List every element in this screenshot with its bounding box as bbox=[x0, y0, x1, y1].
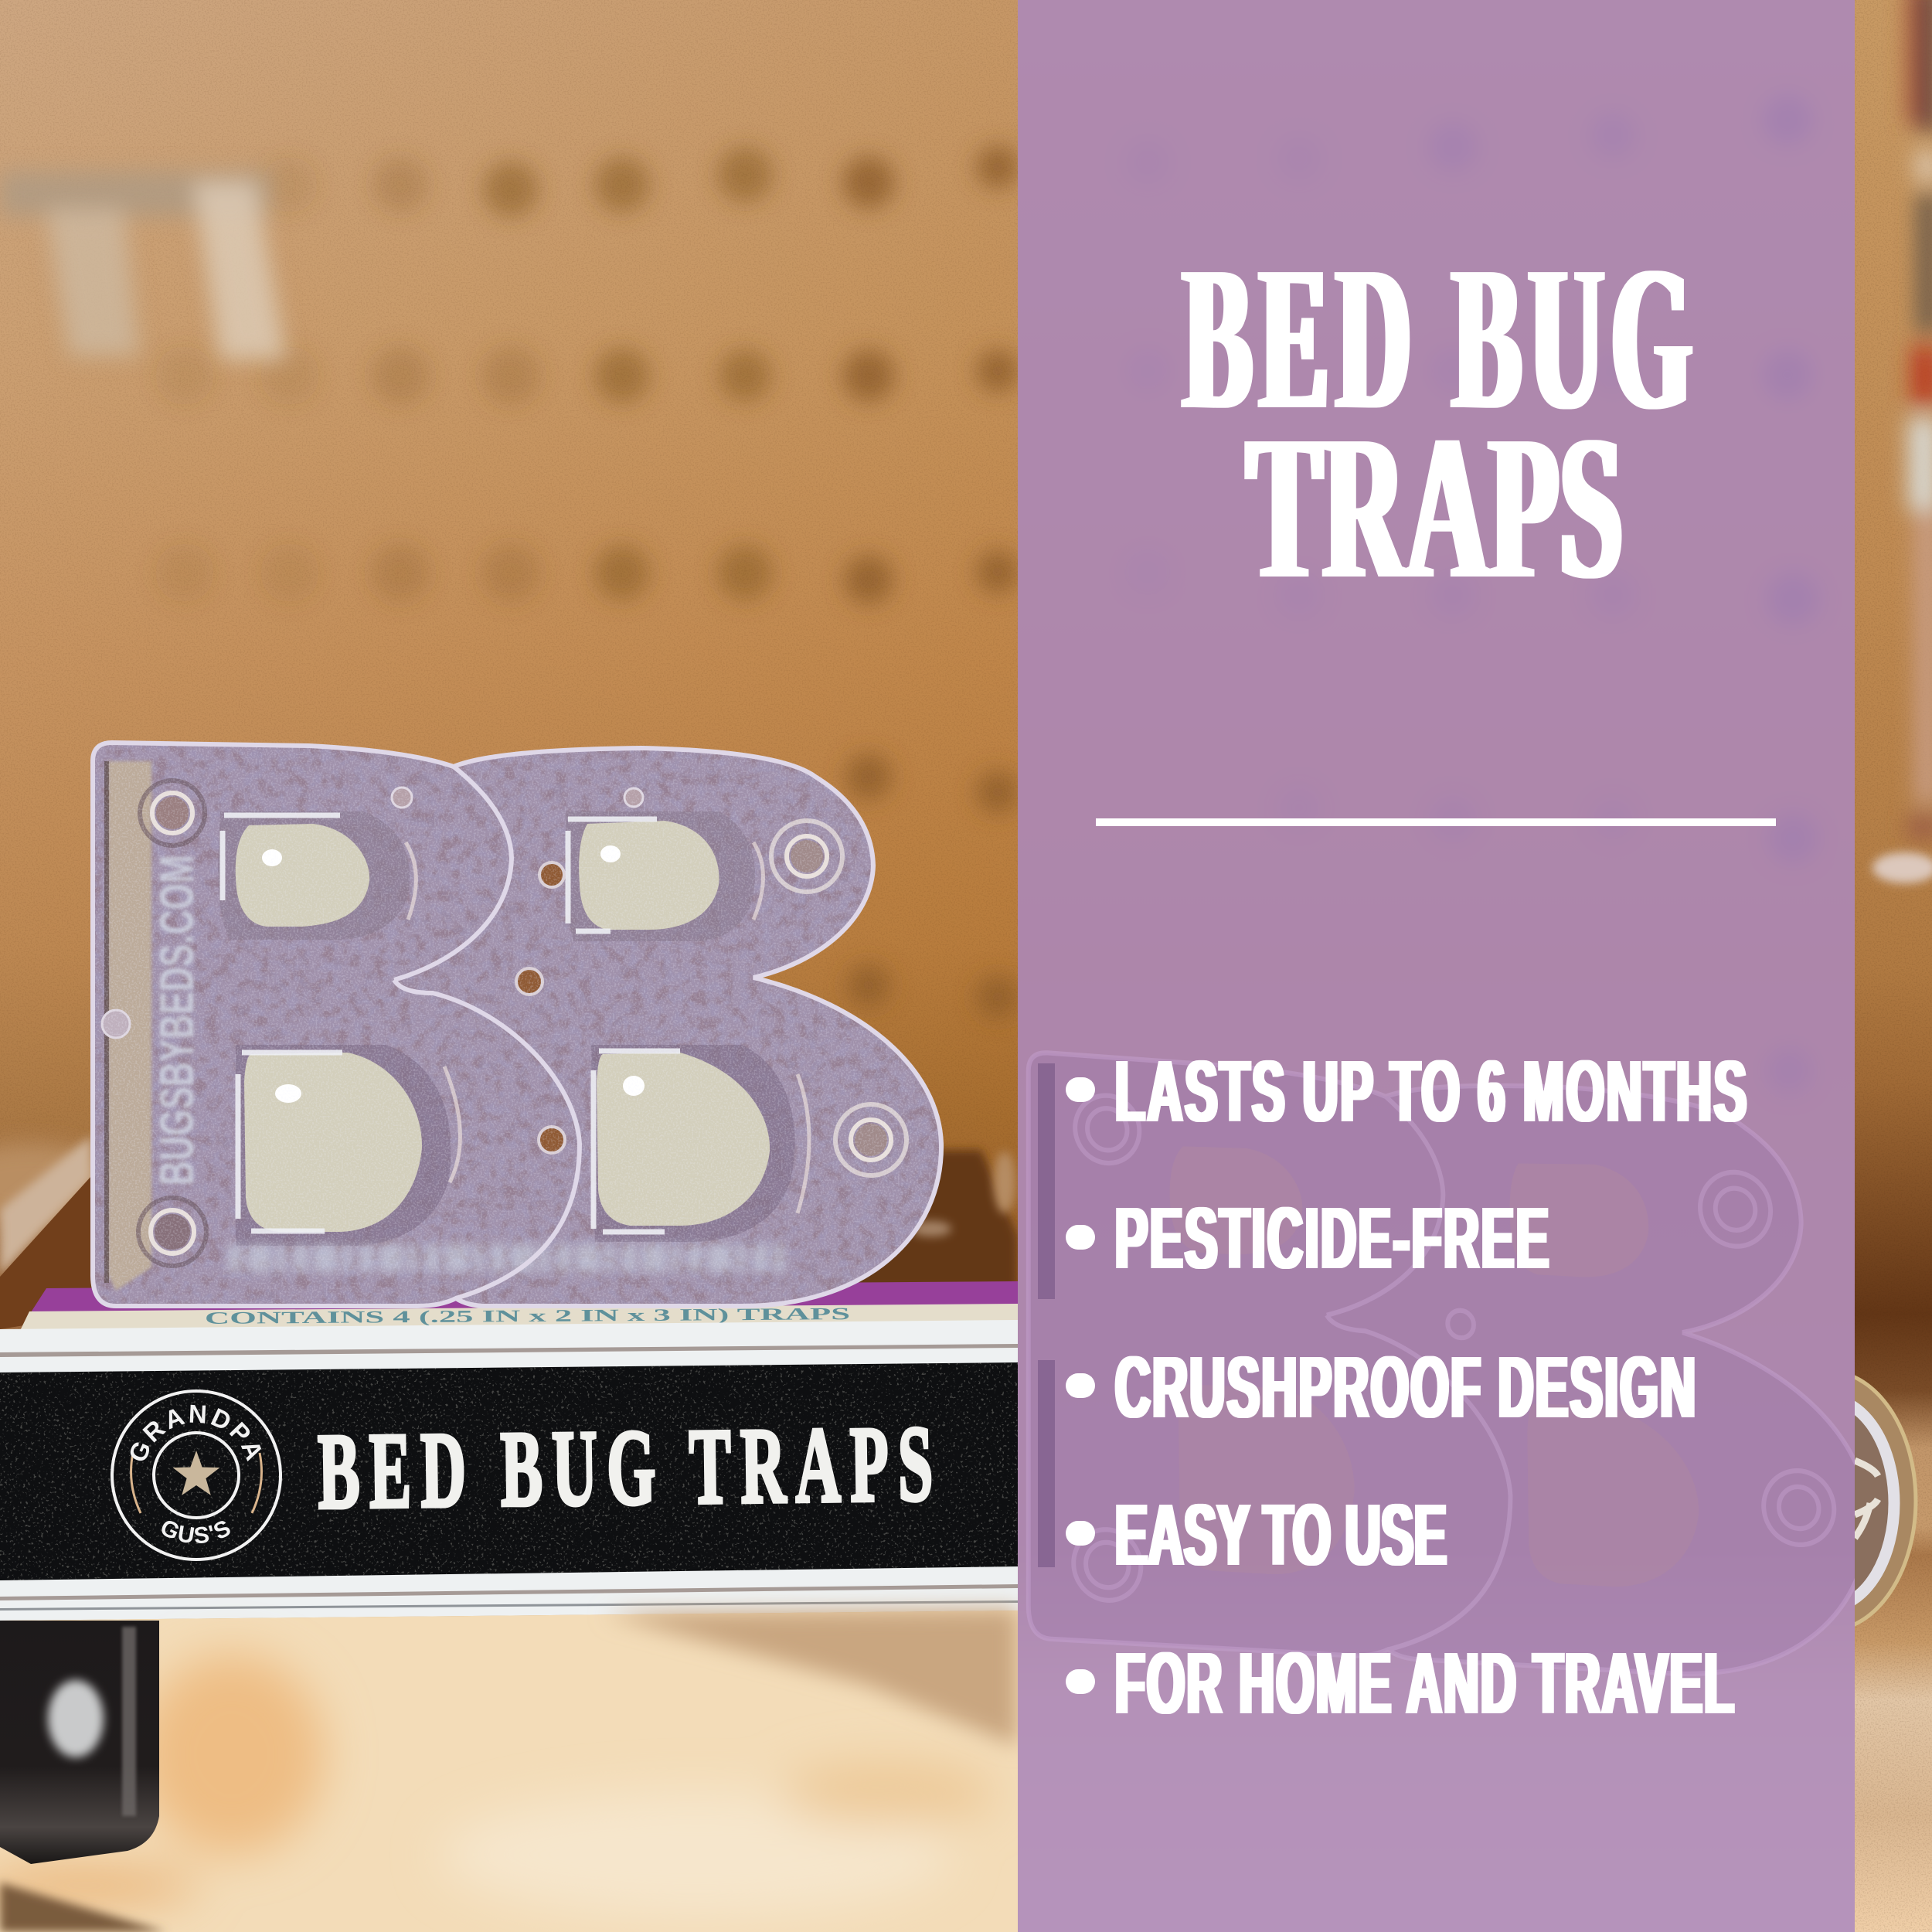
panel text bbox=[1068, 223, 1776, 1733]
Grandpa Gus's logo: GUS'S bbox=[162, 1521, 230, 1543]
ghost dark strip bbox=[1038, 1063, 1055, 1567]
Grandpa Gus's logo bbox=[111, 1389, 282, 1561]
bullet: pesticide-free: PESTICIDE-FREE bbox=[1115, 1190, 1549, 1287]
pegboard holes bbox=[155, 145, 1019, 1019]
Grandpa Gus's logo: GRANDPA bbox=[130, 1405, 261, 1462]
trap on the box bbox=[93, 743, 941, 1306]
box title: BED BUG TRAPS bbox=[317, 1403, 934, 1532]
shelf behind the trap bbox=[0, 1136, 1018, 1329]
faint pegboard holes behind panel bbox=[1124, 95, 1819, 1094]
feature list bbox=[1068, 1043, 1747, 1733]
embossed trap text: BUGSBYBEDS.COM bbox=[151, 855, 204, 1185]
wooden shelf bbox=[0, 1609, 1018, 1932]
wall hook bbox=[0, 172, 286, 359]
box contents line: CONTAINS 4 (.25 IN x 2 IN x 3 IN) TRAPS bbox=[205, 1304, 850, 1328]
photo: pegboard wall, trap and box bbox=[0, 0, 1018, 1932]
wall grain bbox=[0, 0, 1018, 1147]
product box bbox=[0, 1281, 1018, 1621]
panel: purple overlay with ghosted photo bbox=[1018, 0, 1869, 1932]
bullet: lasts up to 6 months: LASTS UP TO 6 MONTHS bbox=[1115, 1043, 1747, 1141]
panel tint bbox=[1018, 0, 1855, 1932]
bullet: for home and travel: FOR HOME AND TRAVEL bbox=[1115, 1635, 1734, 1733]
metal bracket and bolt bbox=[0, 1621, 159, 1864]
divider bbox=[1096, 818, 1776, 826]
second trap edge bbox=[1740, 1371, 1916, 1631]
right edge photo strip bbox=[1740, 0, 1932, 1932]
title: TRAPS bbox=[1247, 393, 1623, 621]
ghosted trap bbox=[1029, 1052, 1869, 1685]
bullet: easy to use: EASY TO USE bbox=[1115, 1487, 1447, 1584]
bullet: crushproof design: CRUSHPROOF DESIGN bbox=[1115, 1339, 1696, 1437]
title bbox=[1183, 223, 1692, 621]
title: BED BUG bbox=[1183, 223, 1692, 452]
